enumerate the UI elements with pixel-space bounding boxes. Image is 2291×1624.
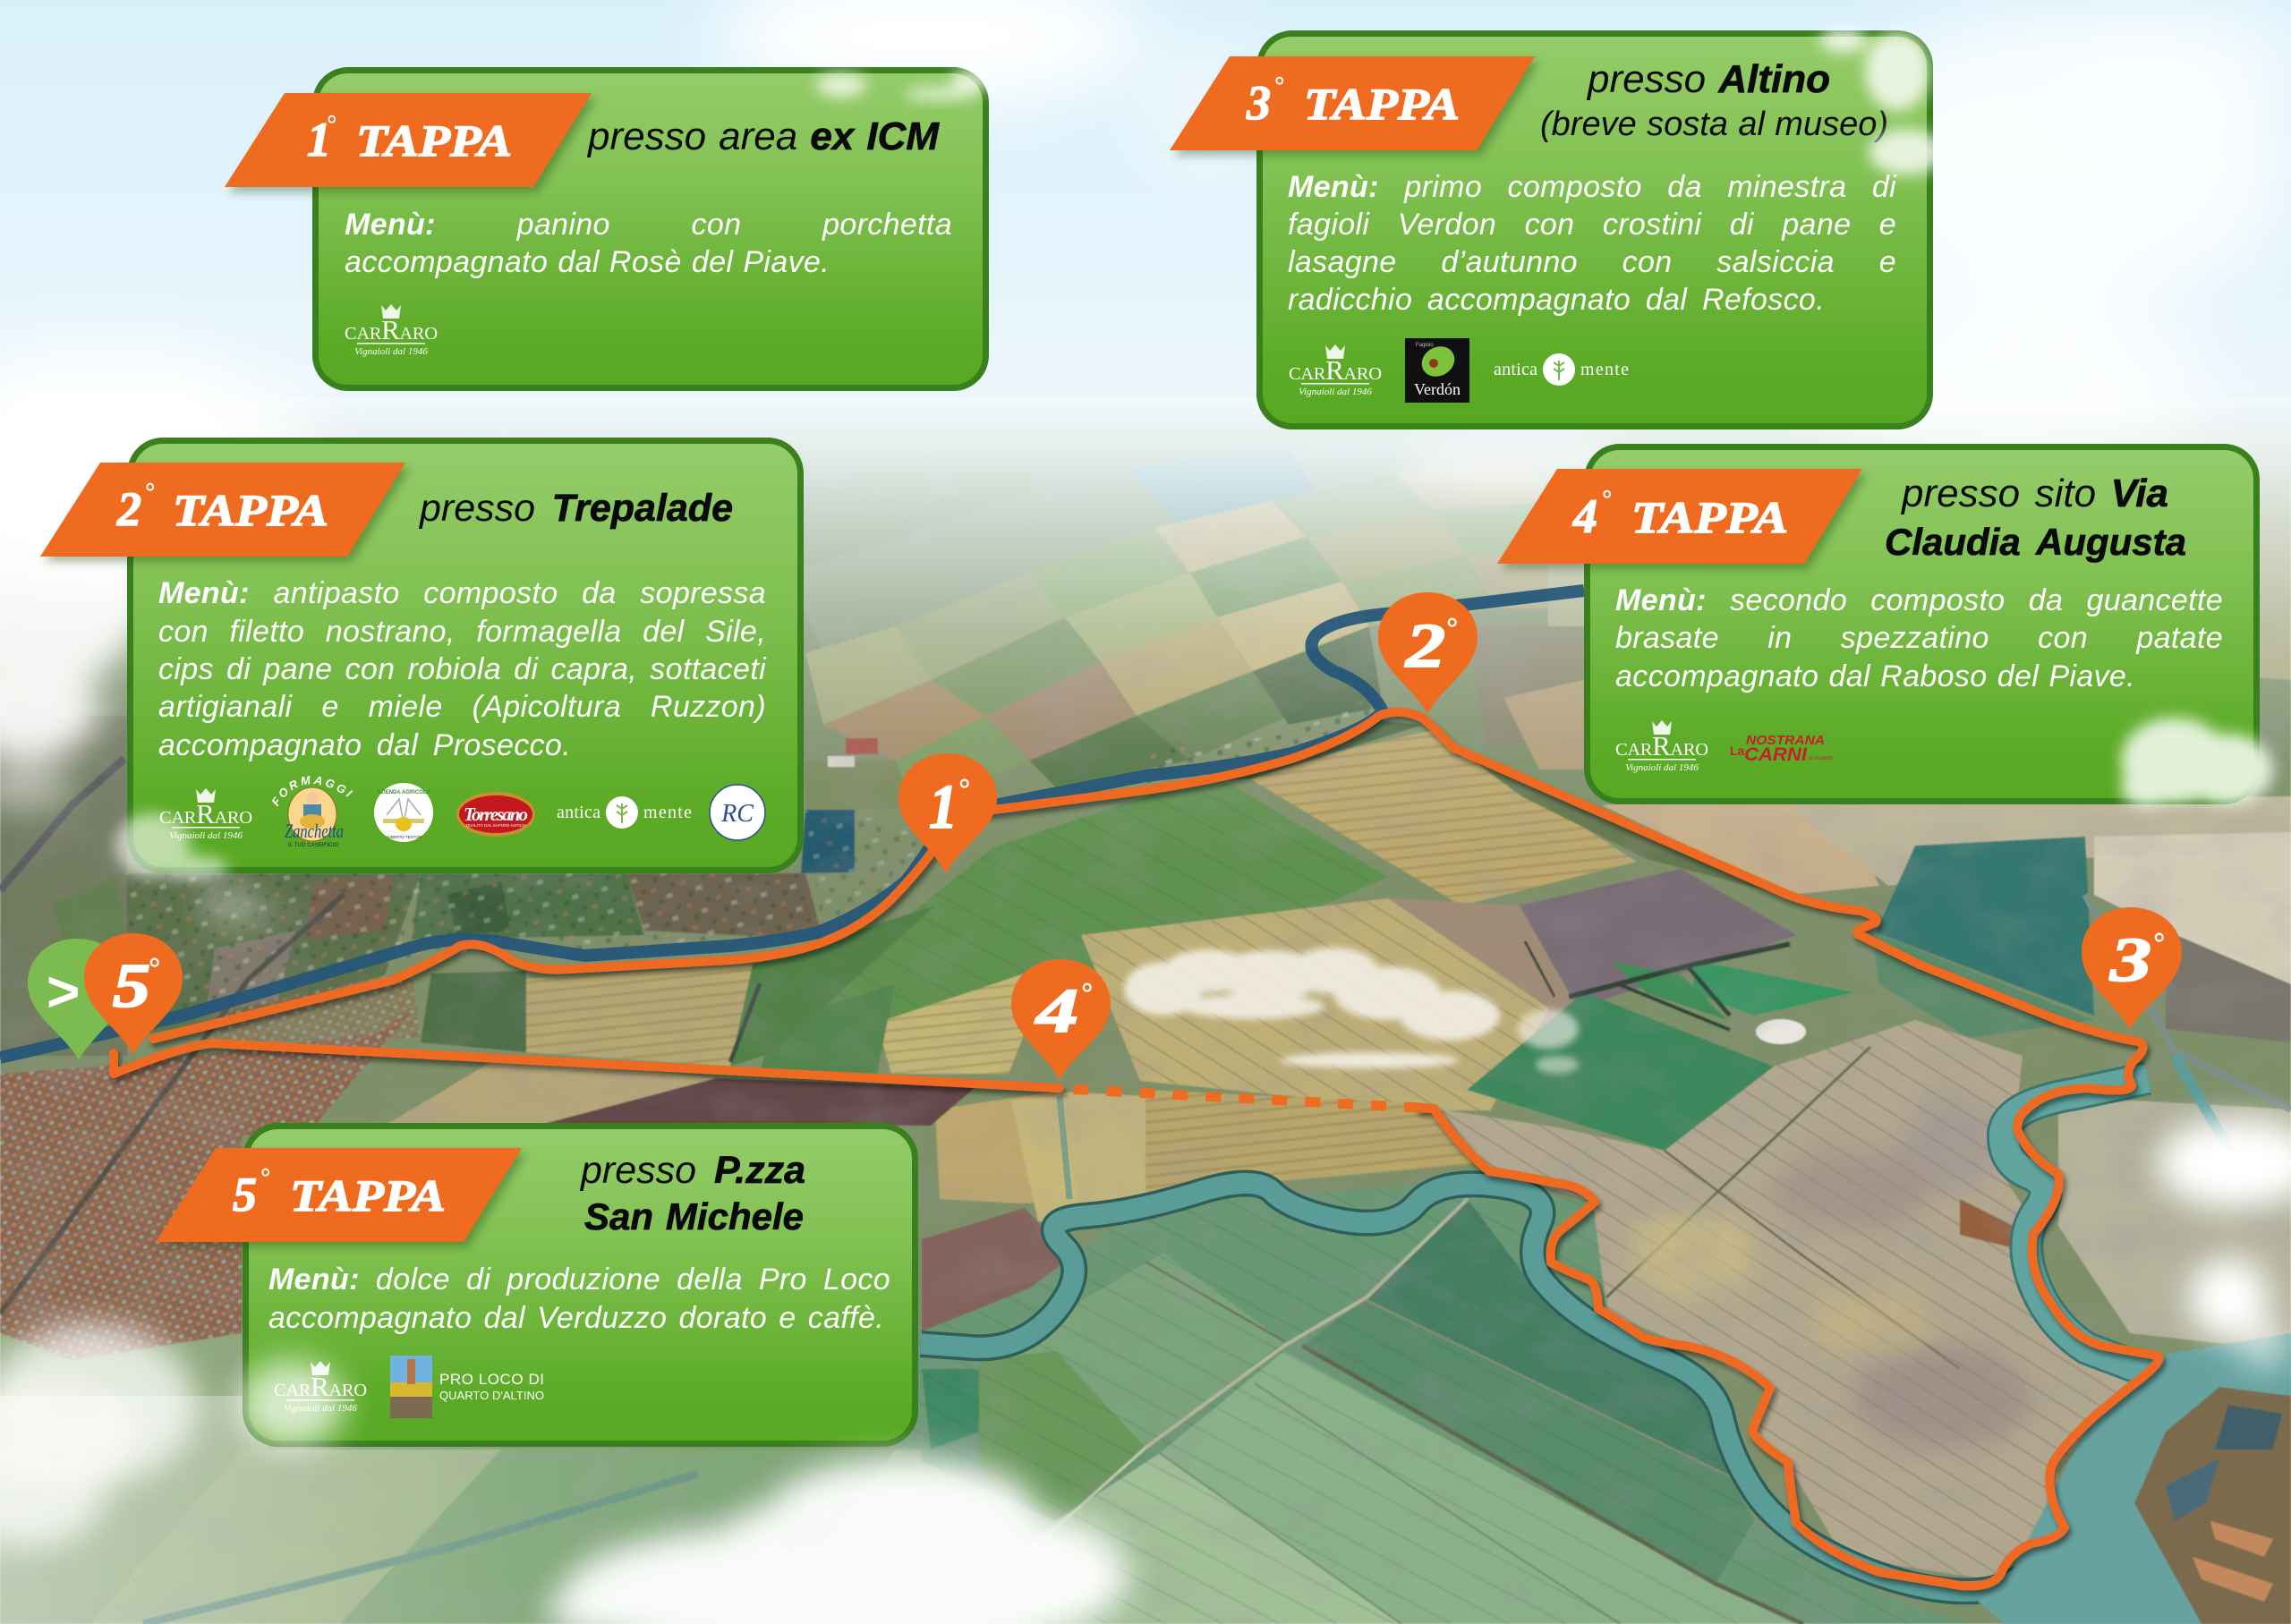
tag: 3 tappa: ° <box>1273 72 1283 100</box>
tag: 4 tappa: 4 <box>1572 489 1597 543</box>
logo: Pro Loco: PRO LOCO DI <box>439 1371 544 1388</box>
menu text: Menù: panino con porchetta <box>345 208 952 242</box>
mottled texture <box>0 403 2291 1624</box>
cloud: panel 3 top right <box>1820 28 1944 175</box>
pin 5 <box>84 933 183 1055</box>
menu text: accompagnato dal Raboso del Piave. <box>1615 659 2135 693</box>
sky clouds <box>0 0 2291 582</box>
menu text: Menù: antipasto composto da sopressa <box>158 576 766 610</box>
logo: La Nostrana Carni: CARNI <box>1744 744 1808 765</box>
logo: Azienda Agricola: AZIENDA AGRICOLA <box>377 790 431 795</box>
tag: 1 tappa: 1 <box>307 113 331 166</box>
heading: presso sito Via <box>1902 472 2168 515</box>
pin 4: ° <box>1080 976 1092 1008</box>
tag: 2 tappa: TAPPA <box>173 485 328 535</box>
logo: Carraro: CARRARO <box>345 314 438 345</box>
logo: Carraro: Vignaioli dal 1946 <box>354 346 428 357</box>
logo: Carraro <box>1289 343 1382 398</box>
menu text: brasate in spezzatino con patate <box>1615 621 2223 655</box>
heading <box>1540 56 1888 148</box>
pin 5: ° <box>148 951 159 983</box>
logo: Carraro: Vignaioli dal 1946 <box>169 830 243 841</box>
pin 1: ° <box>958 772 969 804</box>
tag: 5 tappa: 5 <box>233 1168 257 1221</box>
menu text <box>1288 168 1896 319</box>
logo: Formaggi Zanchetta: FORMAGGI <box>272 776 353 807</box>
heading: (breve sosta al museo) <box>1540 106 1888 143</box>
route line dashed <box>1065 1089 1419 1108</box>
canal <box>0 591 1584 1058</box>
heading: presso area ex ICM <box>588 115 939 158</box>
tag: 5 tappa: ° <box>260 1164 269 1192</box>
logo: Carraro <box>1615 718 1708 774</box>
menu text <box>345 208 952 279</box>
logo: anticamente: antica <box>557 803 600 822</box>
pin 4: 4 <box>1034 977 1078 1046</box>
lagoon and fish ponds <box>1978 1333 2291 1624</box>
logo: Pro Loco <box>390 1356 547 1418</box>
heading: presso Altino <box>1588 57 1830 101</box>
logo: Carraro <box>159 786 252 842</box>
logo: Formaggi Zanchetta: IL TUO CASEIFICIO <box>288 843 338 848</box>
tag: 3 tappa: TAPPA <box>1304 79 1460 129</box>
logo: Formaggi Zanchetta <box>276 778 350 848</box>
logo: Torresano: QUALITÀ DAL SAPORE ANTICO <box>465 822 526 828</box>
logo: Azienda Agricola: ALBERTO TESTON <box>386 835 422 839</box>
logo: La Nostrana Carni <box>1730 732 1832 761</box>
panel: 3rd stop <box>1256 30 1933 429</box>
tag: 1 tappa <box>225 67 966 391</box>
panel: 4th stop <box>1584 444 2260 804</box>
pin 3 <box>2082 907 2182 1030</box>
cloud: bottom centre <box>546 1458 1128 1624</box>
logo: anticamente: mente <box>643 803 692 822</box>
pin 1: 1 <box>929 773 958 842</box>
logo: Carraro: CARRARO <box>1289 354 1382 386</box>
menu text <box>158 576 766 762</box>
farmland fields <box>0 403 2291 1624</box>
logo: Carraro: CARRARO <box>274 1371 367 1402</box>
logo: Torresano <box>456 792 535 837</box>
heading: Claudia Augusta <box>1885 521 2186 563</box>
logo: Verdon: Fagiolo <box>1416 343 1434 348</box>
haze fade over distant land <box>0 398 2291 863</box>
menu text <box>268 1261 890 1337</box>
logo: Carraro <box>345 304 438 357</box>
tag: 5 tappa: TAPPA <box>290 1170 446 1220</box>
logo: Carraro: CARRARO <box>159 798 252 829</box>
pin 4 <box>1011 959 1111 1080</box>
pin 2: ° <box>1445 611 1457 643</box>
menu text <box>1615 582 2223 695</box>
tag: 2 tappa: 2 <box>116 482 141 536</box>
pin 3: ° <box>2152 926 2164 958</box>
start pin <box>28 939 126 1060</box>
logo: Carraro: Vignaioli dal 1946 <box>1299 387 1372 397</box>
heading <box>1885 471 2186 565</box>
tag: 3 tappa: 3 <box>1246 76 1271 130</box>
cloud: panel 4 bottom right <box>2121 718 2273 807</box>
pin 5: 5 <box>113 952 150 1021</box>
menu text: cips di pane con robiola di capra, sottaceti <box>158 652 766 686</box>
pin 2: 2 <box>1405 612 1445 681</box>
pin 2 <box>1378 592 1478 714</box>
logo: Azienda Agricola <box>374 783 433 842</box>
pin 1 <box>899 753 997 873</box>
menu text: Menù: secondo composto da guancette <box>1615 583 2223 617</box>
logo: Carraro <box>274 1359 367 1415</box>
menu text: accompagnato dal Verduzzo dorato e caffè. <box>268 1301 884 1335</box>
tag: 4 tappa: TAPPA <box>1631 492 1788 542</box>
logo: anticamente: antica <box>1494 360 1537 379</box>
tag: 4 tappa <box>1497 469 1873 576</box>
menu text: Menù: primo composto da minestra di <box>1288 170 1896 204</box>
menu text: radicchio accompagnato dal Refosco. <box>1288 283 1825 317</box>
logo: RC: RC <box>720 800 754 828</box>
tag: 1 tappa: TAPPA <box>356 115 512 166</box>
logo: Pro Loco: QUARTO D'ALTINO <box>439 1389 544 1402</box>
start pin: > <box>47 959 80 1024</box>
tag: 5 tappa <box>156 1148 532 1255</box>
logo: Verdon: Verdón <box>1414 380 1461 398</box>
tag: 2 tappa <box>40 462 411 567</box>
route line solid <box>114 712 2159 1586</box>
logo: Verdon <box>1405 338 1469 403</box>
logo: La Nostrana Carni: NOSTRANA <box>1746 733 1825 748</box>
heading: presso P.zza <box>581 1149 805 1192</box>
menu text: lasagne d’autunno con salsiccia e <box>1288 245 1896 279</box>
cloud: panel 1 top right <box>816 68 991 100</box>
panel: 1st stop <box>225 67 989 391</box>
menu text: artigianali e miele (Apicoltura Ruzzon) <box>158 690 766 724</box>
logo: anticamente: mente <box>1580 360 1629 379</box>
logo: Torresano: Torresano <box>464 803 528 825</box>
logo: anticamente <box>557 796 692 829</box>
logo: La Nostrana Carni: di Visentin <box>1809 756 1834 761</box>
tag: 3 tappa <box>1170 56 1546 164</box>
logo: Carraro: Vignaioli dal 1946 <box>1625 762 1699 773</box>
rivers <box>921 895 2291 1591</box>
cloud: panel 2 bottom left <box>115 813 228 880</box>
left edge clouds <box>0 442 1647 931</box>
logo: La Nostrana Carni: La <box>1730 744 1745 758</box>
tag: 2 tappa: ° <box>144 479 154 506</box>
logo: Carraro: CARRARO <box>1615 730 1708 761</box>
soft colour blotches on fields <box>0 1101 2031 1485</box>
menu text: accompagnato dal Prosecco. <box>158 728 571 762</box>
logo: Carraro: Vignaioli dal 1946 <box>284 1403 357 1414</box>
logo: Formaggi Zanchetta: Zanchetta <box>285 820 344 842</box>
cloud: panel 5 bottom left <box>0 1324 345 1548</box>
pin 3: 3 <box>2109 926 2151 995</box>
tag: 1 tappa: ° <box>326 111 336 139</box>
tag: 4 tappa: ° <box>1601 486 1611 514</box>
menu text: con filetto nostrano, formagella del Sile, <box>158 615 766 649</box>
menu text: fagioli Verdon con crostini di pane e <box>1288 208 1896 242</box>
bottom left haze <box>0 1396 1074 1624</box>
heading: presso Trepalade <box>420 487 733 530</box>
logo: anticamente <box>1494 353 1629 386</box>
cloud: right side <box>2157 1118 2291 1369</box>
panel: 2nd stop <box>40 438 804 873</box>
panel: 5th stop <box>243 1123 918 1447</box>
cloud: centre map <box>1124 948 1579 1074</box>
heading <box>581 1147 805 1240</box>
heading: San Michele <box>584 1195 804 1237</box>
menu text: accompagnato dal Rosè del Piave. <box>345 245 830 279</box>
logo: RC <box>709 784 766 841</box>
menu text: Menù: dolce di produzione della Pro Loco <box>268 1263 890 1297</box>
